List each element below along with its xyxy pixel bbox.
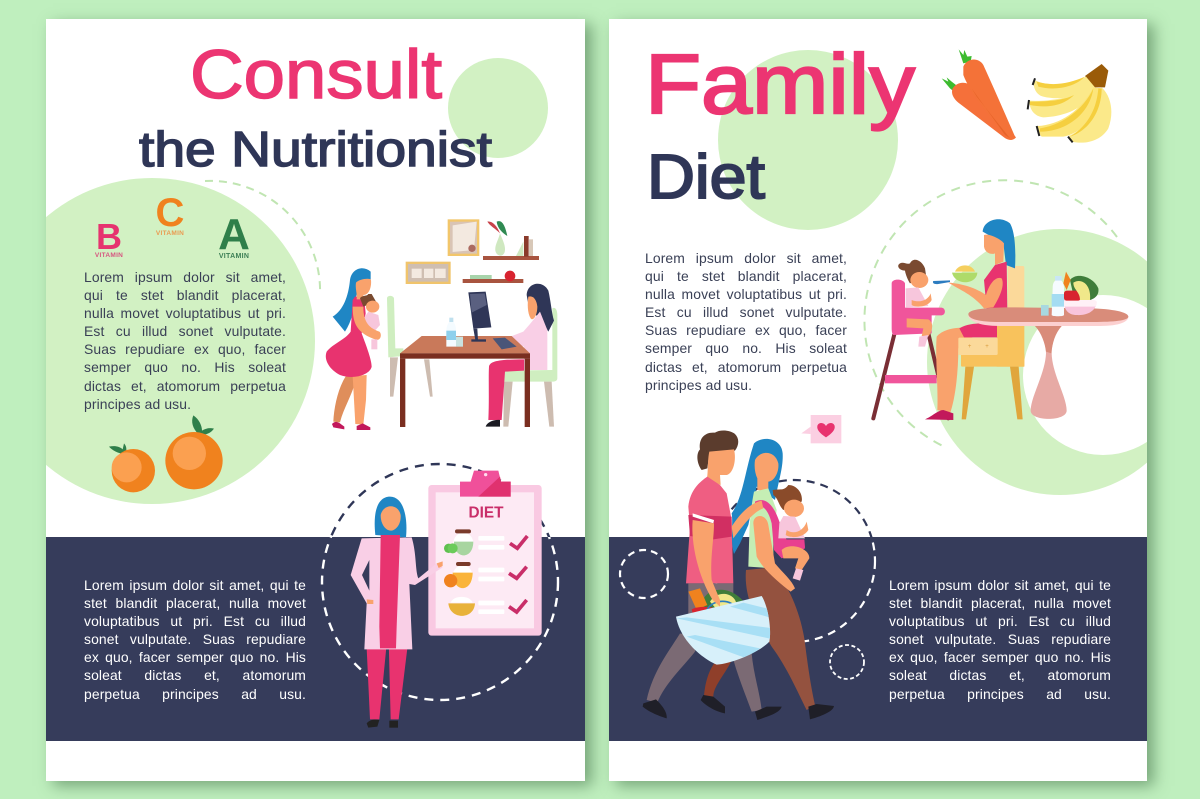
desk	[400, 336, 530, 427]
high chair	[885, 280, 945, 383]
dark lower band	[609, 537, 1147, 741]
dashed circle around doctor, dark part	[330, 462, 550, 537]
basket of vegetables	[676, 588, 773, 665]
text block: intro paragraph: Suas repudiare ex quo, facer	[645, 322, 847, 338]
text block: intro paragraph: Lorem ipsum dolor sit amet,	[84, 269, 286, 285]
text block: intro paragraph: dictas et, atomorum perpetua	[84, 378, 286, 394]
mother: +	[968, 344, 972, 350]
carried baby	[773, 485, 809, 581]
text block: intro paragraph: nulla movet voluptatibus ut pri.	[645, 286, 847, 302]
title: the Nutritionist: the Nutritionist	[139, 123, 492, 177]
decorative green circle behind title	[448, 58, 548, 158]
icon: carrots	[942, 49, 1016, 140]
title: Family: Family	[645, 37, 915, 131]
text block: lower paragraph	[84, 577, 306, 702]
dark lower band	[46, 537, 585, 741]
text block: intro paragraph: principes ad usu.	[645, 377, 752, 393]
icon: oranges	[109, 415, 223, 492]
clipboard	[428, 471, 542, 636]
doctor	[486, 284, 554, 427]
text block: intro paragraph: dictas et, atomorum perpetua	[645, 359, 847, 375]
green dashed arc	[205, 181, 320, 295]
small dashed circle right	[830, 645, 864, 679]
text block: lower paragraph: ex quo, facer semper quo no. His	[889, 649, 1111, 665]
text block: intro paragraph	[645, 250, 847, 393]
illustration: diet clipboard and nutritionist	[351, 471, 542, 728]
lower shelf with apple	[463, 271, 523, 283]
title: Diet: Diet	[647, 143, 765, 212]
text block: intro paragraph: nulla movet voluptatibus ut pri.	[84, 305, 286, 321]
text block: intro paragraph: qui te stet blandit placerat,	[645, 268, 847, 284]
chair back	[961, 266, 1024, 419]
text block: lower paragraph: sonet vulputate. Suas repudiare	[889, 631, 1111, 647]
large green ring	[927, 229, 1193, 495]
text block: intro paragraph: principes ad usu.	[84, 396, 191, 412]
icon: vitamin C: VITAMIN	[156, 230, 184, 237]
food on table	[1041, 272, 1098, 316]
checklist item 1	[444, 529, 527, 555]
text block: lower paragraph: perpetua principes ad usu.	[84, 686, 306, 702]
green circle behind title	[718, 50, 898, 230]
heart speech bubble	[801, 415, 841, 443]
title: Consult: Consult	[190, 36, 442, 113]
icon: vitamin C: C	[156, 191, 184, 235]
mother: +	[985, 344, 989, 350]
monitor and keyboard	[468, 292, 517, 349]
nutritionist figure	[351, 497, 443, 728]
text block: intro paragraph	[84, 269, 286, 412]
upper shelf with vase and books	[483, 221, 539, 260]
text block: lower paragraph: stet blandit placerat, nulla movet	[889, 595, 1111, 611]
green dashed arc	[864, 180, 1117, 447]
dashed circle around doctor, light part	[320, 537, 560, 702]
text block: intro paragraph: Lorem ipsum dolor sit amet,	[645, 250, 847, 266]
text block: lower paragraph: Lorem ipsum dolor sit amet, qui te	[889, 577, 1111, 593]
dashed circle behind family, light part	[715, 542, 876, 642]
baby	[898, 260, 932, 347]
icon: vitamin A: VITAMIN	[219, 253, 249, 260]
icon: vitamin B: B	[96, 216, 122, 257]
woman	[732, 439, 834, 719]
man	[643, 431, 782, 720]
panel: Family Diet page	[609, 19, 1147, 781]
certificate on wall	[448, 219, 479, 256]
text block: intro paragraph: Est cu illud sonet vulputate.	[84, 323, 286, 339]
mother	[925, 219, 1015, 420]
clipboard: DIET	[469, 504, 504, 521]
illustration: mother feeding baby at table	[873, 219, 1128, 420]
icon: vitamin A: A	[218, 210, 250, 259]
icon: vitamin B: VITAMIN	[95, 252, 123, 259]
dashed circle behind family, dark part	[730, 478, 872, 537]
man back leg	[647, 633, 698, 703]
text block: lower paragraph: voluptatibus ut pri. Est cu illud	[84, 613, 306, 629]
text block: lower paragraph: voluptatibus ut pri. Est cu illud	[889, 613, 1111, 629]
doctor chair	[500, 308, 557, 427]
checklist item 2	[444, 562, 527, 588]
panel: Consult the Nutritionist page	[46, 19, 585, 781]
text block: intro paragraph: Est cu illud sonet vulputate.	[645, 304, 847, 320]
bottle and glass	[446, 318, 463, 347]
small dashed circle left	[620, 550, 668, 598]
table	[968, 307, 1128, 419]
illustration: mother with baby at doctor's office	[326, 219, 557, 430]
white ring hole	[1023, 295, 1183, 455]
woman back leg	[704, 660, 732, 697]
mother with baby	[326, 268, 381, 430]
text block: lower paragraph: ex quo, facer semper quo no. His	[84, 649, 306, 665]
picture frame	[406, 262, 451, 284]
checklist item 3	[448, 597, 527, 616]
text block: lower paragraph: sonet vulputate. Suas repudiare	[84, 631, 306, 647]
text block: intro paragraph: semper quo no. His soleat	[84, 359, 286, 375]
high chair legs	[873, 332, 948, 418]
bowl and spoon	[933, 265, 977, 284]
large green circle	[0, 178, 315, 504]
text block: intro paragraph: Suas repudiare ex quo, facer	[84, 341, 286, 357]
text block: lower paragraph: soleat dictas et, atomorum	[84, 667, 306, 683]
text block: lower paragraph: Lorem ipsum dolor sit amet, qui te	[84, 577, 306, 593]
illustration: family walking with basket	[643, 415, 841, 720]
text block: lower paragraph: perpetua principes ad usu.	[889, 686, 1111, 702]
text block: intro paragraph: semper quo no. His soleat	[645, 340, 847, 356]
text block: lower paragraph	[889, 577, 1111, 702]
icon: bananas	[1028, 64, 1111, 143]
text block: intro paragraph: qui te stet blandit placerat,	[84, 287, 286, 303]
text block: lower paragraph: stet blandit placerat, nulla movet	[84, 595, 306, 611]
visitor chair	[387, 296, 433, 397]
text block: lower paragraph: soleat dictas et, atomorum	[889, 667, 1111, 683]
man front arm	[692, 520, 720, 607]
